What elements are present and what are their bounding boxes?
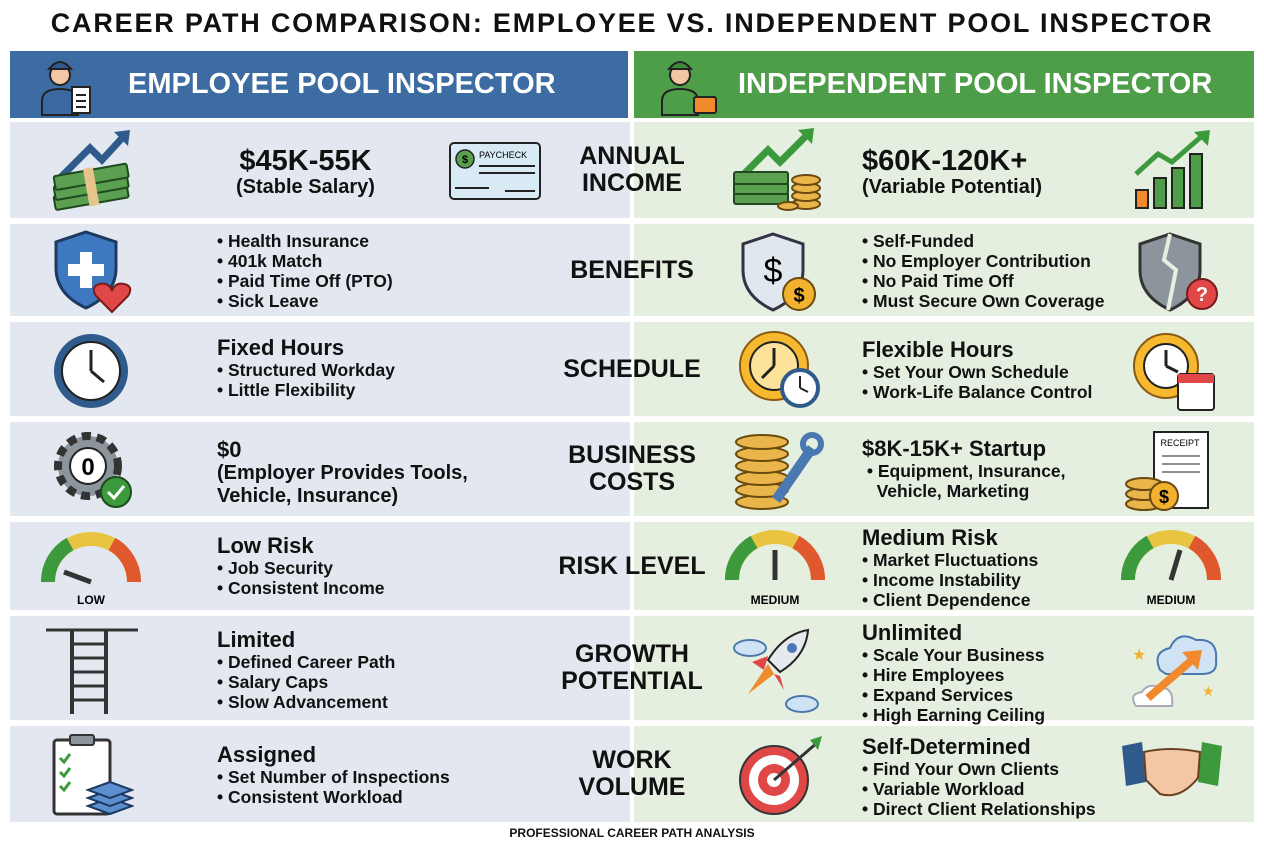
icon: broken shield: ? xyxy=(1196,284,1208,306)
label growth: GROWTH xyxy=(575,640,689,668)
text: independent benefits xyxy=(862,231,1104,311)
icon: handshake xyxy=(1120,738,1224,806)
text: employee growth: • Salary Caps xyxy=(217,672,328,692)
text: independent benefits: • Self-Funded xyxy=(862,231,974,251)
text: employee benefits xyxy=(217,231,393,311)
text: employee schedule: Fixed Hours xyxy=(217,335,344,360)
icon: sun clock xyxy=(739,331,820,408)
text: employee benefits: • Sick Leave xyxy=(217,291,318,311)
header: employee xyxy=(10,51,628,118)
text: employee volume: Assigned xyxy=(217,742,316,767)
text: employee growth: • Slow Advancement xyxy=(217,692,388,712)
icon: receipt: RECEIPT xyxy=(1160,438,1200,448)
text: independent growth: • Expand Services xyxy=(862,685,1013,705)
row backgrounds xyxy=(10,122,630,218)
icon: gauge medium right: MEDIUM xyxy=(1147,593,1195,607)
labels: ANNUAL xyxy=(579,142,685,170)
text: independent volume: • Direct Client Relationships xyxy=(862,799,1096,819)
label benefits: BENEFITS xyxy=(570,256,694,284)
text: independent benefits: • No Employer Contribution xyxy=(862,251,1091,271)
label costs xyxy=(568,441,696,496)
text: employee schedule: • Structured Workday xyxy=(217,360,395,380)
text: independent volume: Self-Determined xyxy=(862,734,1031,759)
text: employee costs: $0 xyxy=(217,437,241,462)
icon: gauge medium right xyxy=(1121,530,1221,607)
text: independent schedule: • Work-Life Balance Control xyxy=(862,382,1092,402)
icon: clipboard xyxy=(52,734,134,816)
labels: INCOME xyxy=(582,169,682,197)
label risk: RISK LEVEL xyxy=(558,552,706,580)
text: employee benefits: • 401k Match xyxy=(217,251,322,271)
text: employee income: (Stable Salary) xyxy=(236,176,375,198)
icon: shield dollar: $ xyxy=(764,252,783,290)
icon: receipt xyxy=(1125,431,1209,511)
title: CAREER PATH COMPARISON: EMPLOYEE VS. INDEPENDENT POOL INSPECTOR xyxy=(51,8,1213,38)
text: employee schedule: • Little Flexibility xyxy=(217,380,355,400)
icon: paycheck: PAYCHECK xyxy=(479,150,527,160)
text: employee benefits: • Paid Time Off (PTO) xyxy=(217,271,393,291)
text: independent costs: $8K-15K+ Startup xyxy=(862,436,1046,461)
label schedule: SCHEDULE xyxy=(563,354,701,382)
text: employee benefits: • Health Insurance xyxy=(217,231,369,251)
icon: gauge medium xyxy=(725,530,825,607)
icon: broken shield xyxy=(1138,232,1218,312)
icon: ladder xyxy=(46,628,138,714)
icon: shield heart xyxy=(54,230,132,314)
icon: money stack xyxy=(52,130,130,211)
text: independent growth: • High Earning Ceiling xyxy=(862,705,1045,725)
footer: PROFESSIONAL CAREER PATH ANALYSIS xyxy=(509,826,755,840)
icon: bar chart xyxy=(1134,130,1210,209)
text: independent risk: • Market Fluctuations xyxy=(862,550,1038,570)
text: independent costs xyxy=(862,436,1066,501)
icon: money coins xyxy=(733,128,821,211)
text: independent schedule: Flexible Hours xyxy=(862,337,1014,362)
header: independent xyxy=(634,51,1254,118)
text: independent risk: • Client Dependence xyxy=(862,590,1031,610)
text: independent costs: Vehicle, Marketing xyxy=(877,481,1029,501)
icon: employee xyxy=(41,61,91,116)
text: employee growth: • Defined Career Path xyxy=(217,652,395,672)
text: employee schedule xyxy=(217,335,395,400)
header: independent: INDEPENDENT POOL INSPECTOR xyxy=(738,68,1212,100)
text: independent income: (Variable Potential) xyxy=(862,176,1042,198)
text: independent income: $60K-120K+ xyxy=(862,145,1027,177)
label costs: COSTS xyxy=(589,468,675,496)
icon: clock calendar xyxy=(1133,333,1215,411)
label growth: POTENTIAL xyxy=(561,667,703,695)
text: independent growth: • Hire Employees xyxy=(862,665,1004,685)
icon: cloud arrow xyxy=(1132,635,1218,707)
text: independent volume: • Find Your Own Clients xyxy=(862,759,1059,779)
text: independent growth xyxy=(862,620,1045,725)
text: employee risk: • Job Security xyxy=(217,558,333,578)
icon: rocket xyxy=(733,628,819,713)
text: employee growth xyxy=(217,627,395,712)
icon: paycheck: $ xyxy=(462,154,468,166)
labels xyxy=(579,142,685,197)
text: employee risk: • Consistent Income xyxy=(217,578,385,598)
text: employee income: $45K-55K xyxy=(239,145,372,177)
icon: shield dollar: $ xyxy=(793,285,805,307)
icon: independent xyxy=(661,61,717,116)
text: independent volume xyxy=(862,735,1096,819)
label growth xyxy=(561,640,703,695)
icon: target xyxy=(739,736,822,815)
icon: gear zero: 0 xyxy=(81,454,95,481)
text: independent schedule: • Set Your Own Schedule xyxy=(862,362,1069,382)
text: employee volume: • Consistent Workload xyxy=(217,787,403,807)
text: employee costs: Vehicle, Insurance) xyxy=(217,485,398,507)
label costs: BUSINESS xyxy=(568,441,696,469)
icon: receipt: $ xyxy=(1159,487,1169,507)
text: employee volume xyxy=(217,742,450,807)
text: employee income xyxy=(236,145,375,198)
text: employee volume: • Set Number of Inspections xyxy=(217,767,450,787)
text: independent costs: • Equipment, Insurance, xyxy=(867,461,1066,481)
text: independent growth: Unlimited xyxy=(862,620,962,645)
text: independent benefits: • Must Secure Own Coverage xyxy=(862,291,1104,311)
icon: paycheck xyxy=(449,142,541,200)
text: independent schedule xyxy=(862,337,1092,402)
icon: gauge low xyxy=(41,532,141,607)
text: employee risk xyxy=(217,533,385,598)
text: independent risk: Medium Risk xyxy=(862,525,998,550)
text: independent growth: • Scale Your Business xyxy=(862,645,1045,665)
icon: gear zero xyxy=(54,432,132,508)
text: employee growth: Limited xyxy=(217,627,295,652)
text: independent risk xyxy=(862,525,1038,610)
label volume: WORK xyxy=(592,746,672,774)
text: independent volume: • Variable Workload xyxy=(862,779,1024,799)
text: independent benefits: • No Paid Time Off xyxy=(862,271,1014,291)
icon: clock xyxy=(54,334,128,408)
text: independent income xyxy=(862,145,1042,198)
header: employee: EMPLOYEE POOL INSPECTOR xyxy=(128,68,556,100)
label volume xyxy=(578,746,685,801)
text: employee costs xyxy=(217,437,468,507)
label volume: VOLUME xyxy=(579,773,685,801)
icon: coins wrench xyxy=(735,432,824,510)
icon: gauge low: LOW xyxy=(77,593,106,607)
icon: gauge medium: MEDIUM xyxy=(751,593,799,607)
icon: shield dollar xyxy=(742,232,816,312)
icon: cloud arrow: ★ xyxy=(1132,647,1146,664)
text: employee risk: Low Risk xyxy=(217,533,314,558)
icon: cloud arrow: ★ xyxy=(1202,683,1215,699)
text: independent risk: • Income Instability xyxy=(862,570,1021,590)
text: employee costs: (Employer Provides Tools, xyxy=(217,462,468,484)
